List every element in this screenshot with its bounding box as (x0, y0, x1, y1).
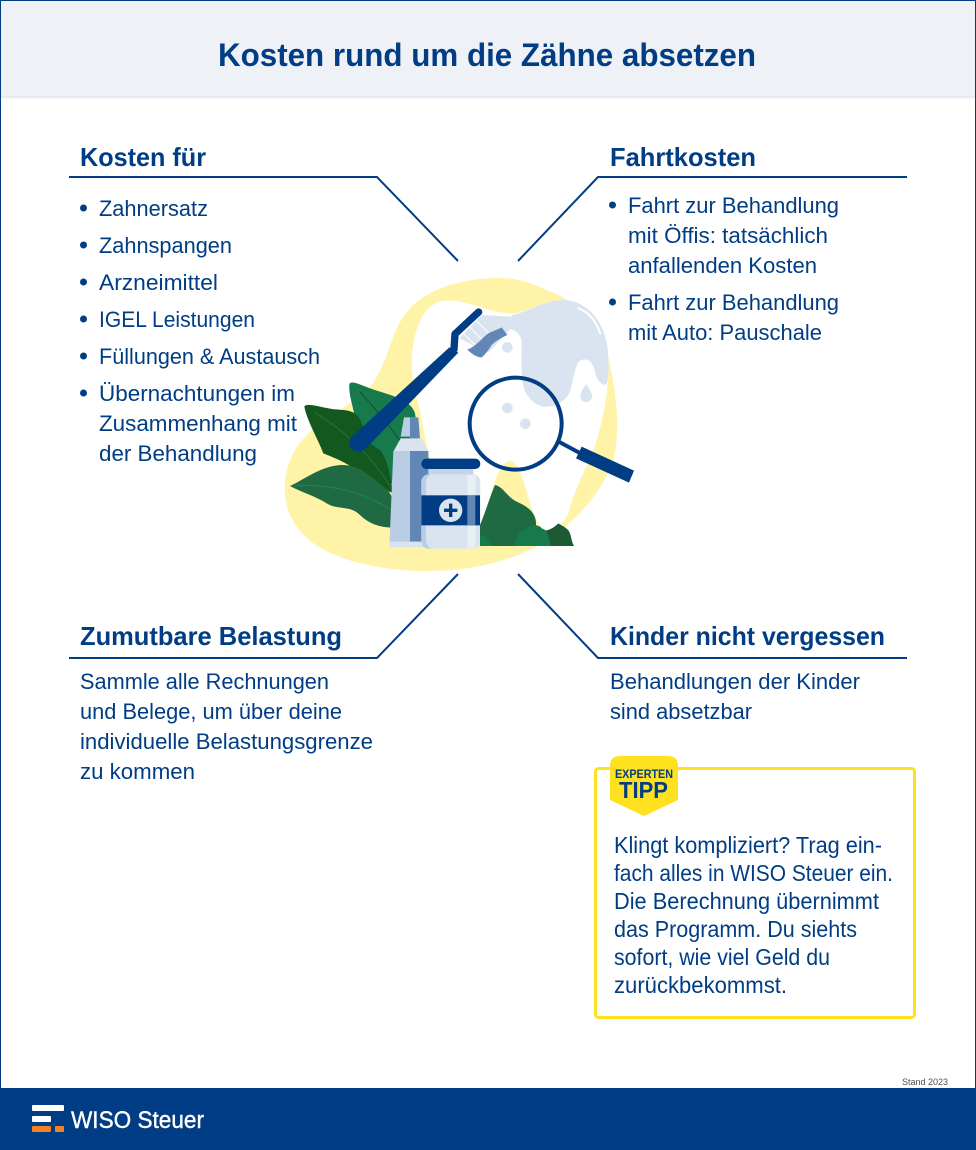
date note: Stand 2023 (902, 1077, 948, 1087)
badge: Experten Tipp (610, 756, 678, 816)
badge: Experten Tipp: TIPP (619, 777, 668, 803)
text block: sind absetzbar (610, 699, 752, 724)
list: travel costs: mit Auto: Pauschale (628, 320, 822, 345)
panel: Kosten für (69, 142, 458, 466)
medicine jar (421, 459, 480, 549)
list: cost items: Füllungen & Austausch (99, 344, 320, 369)
callout: Experten-Tipp (596, 756, 914, 1018)
callout text: sofort, wie viel Geld du (614, 944, 830, 970)
list: cost items: der Behandlung (99, 441, 257, 466)
footer band (0, 1088, 976, 1150)
list: cost items (80, 196, 320, 466)
panel: Kinder nicht vergessen (518, 574, 907, 724)
toothbrush (349, 312, 512, 451)
panel: Zumutbare Belastung (69, 574, 458, 784)
text block: zu kommen (80, 759, 195, 784)
heading: Kosten für: Kosten für (80, 142, 206, 172)
list: cost items: IGEL Leistungen (99, 307, 255, 332)
list: travel costs (609, 193, 839, 345)
logo: WISO Steuer: WISO Steuer (71, 1107, 204, 1134)
text block: und Belege, um über deine (80, 699, 342, 724)
tooth (412, 300, 608, 537)
connector line top right (518, 177, 907, 261)
heading: Zumutbare Belastung: Zumutbare Belastung (80, 621, 342, 651)
text block: individuelle Belastungsgrenze (80, 729, 373, 754)
list: travel costs: Fahrt zur Behandlung (628, 193, 839, 218)
heading: Fahrtkosten: Fahrtkosten (610, 142, 756, 172)
connector line top left (69, 177, 458, 261)
connector line bottom right (518, 574, 907, 658)
list: travel costs: anfallenden Kosten (628, 253, 817, 278)
callout text: fach alles in WISO Steuer ein. (614, 860, 893, 886)
callout text: Die Berechnung übernimmt (614, 888, 880, 914)
badge: Experten Tipp: EXPERTEN (615, 769, 673, 781)
yellow blob (285, 278, 617, 571)
tooth plaque shade (510, 300, 609, 407)
callout text: Klingt kompliziert? Trag ein- (614, 832, 882, 858)
connector line bottom left (69, 574, 458, 658)
text block (80, 669, 373, 784)
logo: WISO Steuer (32, 1105, 204, 1134)
callout text (614, 832, 893, 998)
text block: Behandlungen der Kinder (610, 669, 860, 694)
list: travel costs: mit Öffis: tatsächlich (628, 223, 828, 248)
list: cost items: Zusammenhang mit (99, 411, 298, 436)
magnifying glass (470, 378, 634, 483)
text block (610, 669, 860, 724)
back leaves (349, 383, 431, 483)
panel: Fahrtkosten (518, 142, 907, 345)
list: cost items: Zahnspangen (99, 233, 232, 258)
list: cost items: Arzneimittel (99, 270, 218, 295)
callout text: zurückbekommst. (614, 972, 787, 998)
text block: Sammle alle Rechnungen (80, 669, 329, 694)
central illustration: tooth, brush, magnifier, tube, jar, leaves (285, 278, 634, 571)
list: travel costs: Fahrt zur Behandlung (628, 290, 839, 315)
header band with title (1, 1, 975, 100)
title: Kosten rund um die Zähne absetzen (218, 37, 756, 73)
heading: Kinder nicht vergessen: Kinder nicht vergessen (610, 621, 885, 651)
callout text: das Programm. Du siehts (614, 916, 857, 942)
list: cost items: Zahnersatz (99, 196, 208, 221)
toothpaste tube (389, 417, 429, 547)
front bushes (480, 485, 574, 546)
list: cost items: Übernachtungen im (99, 381, 295, 406)
